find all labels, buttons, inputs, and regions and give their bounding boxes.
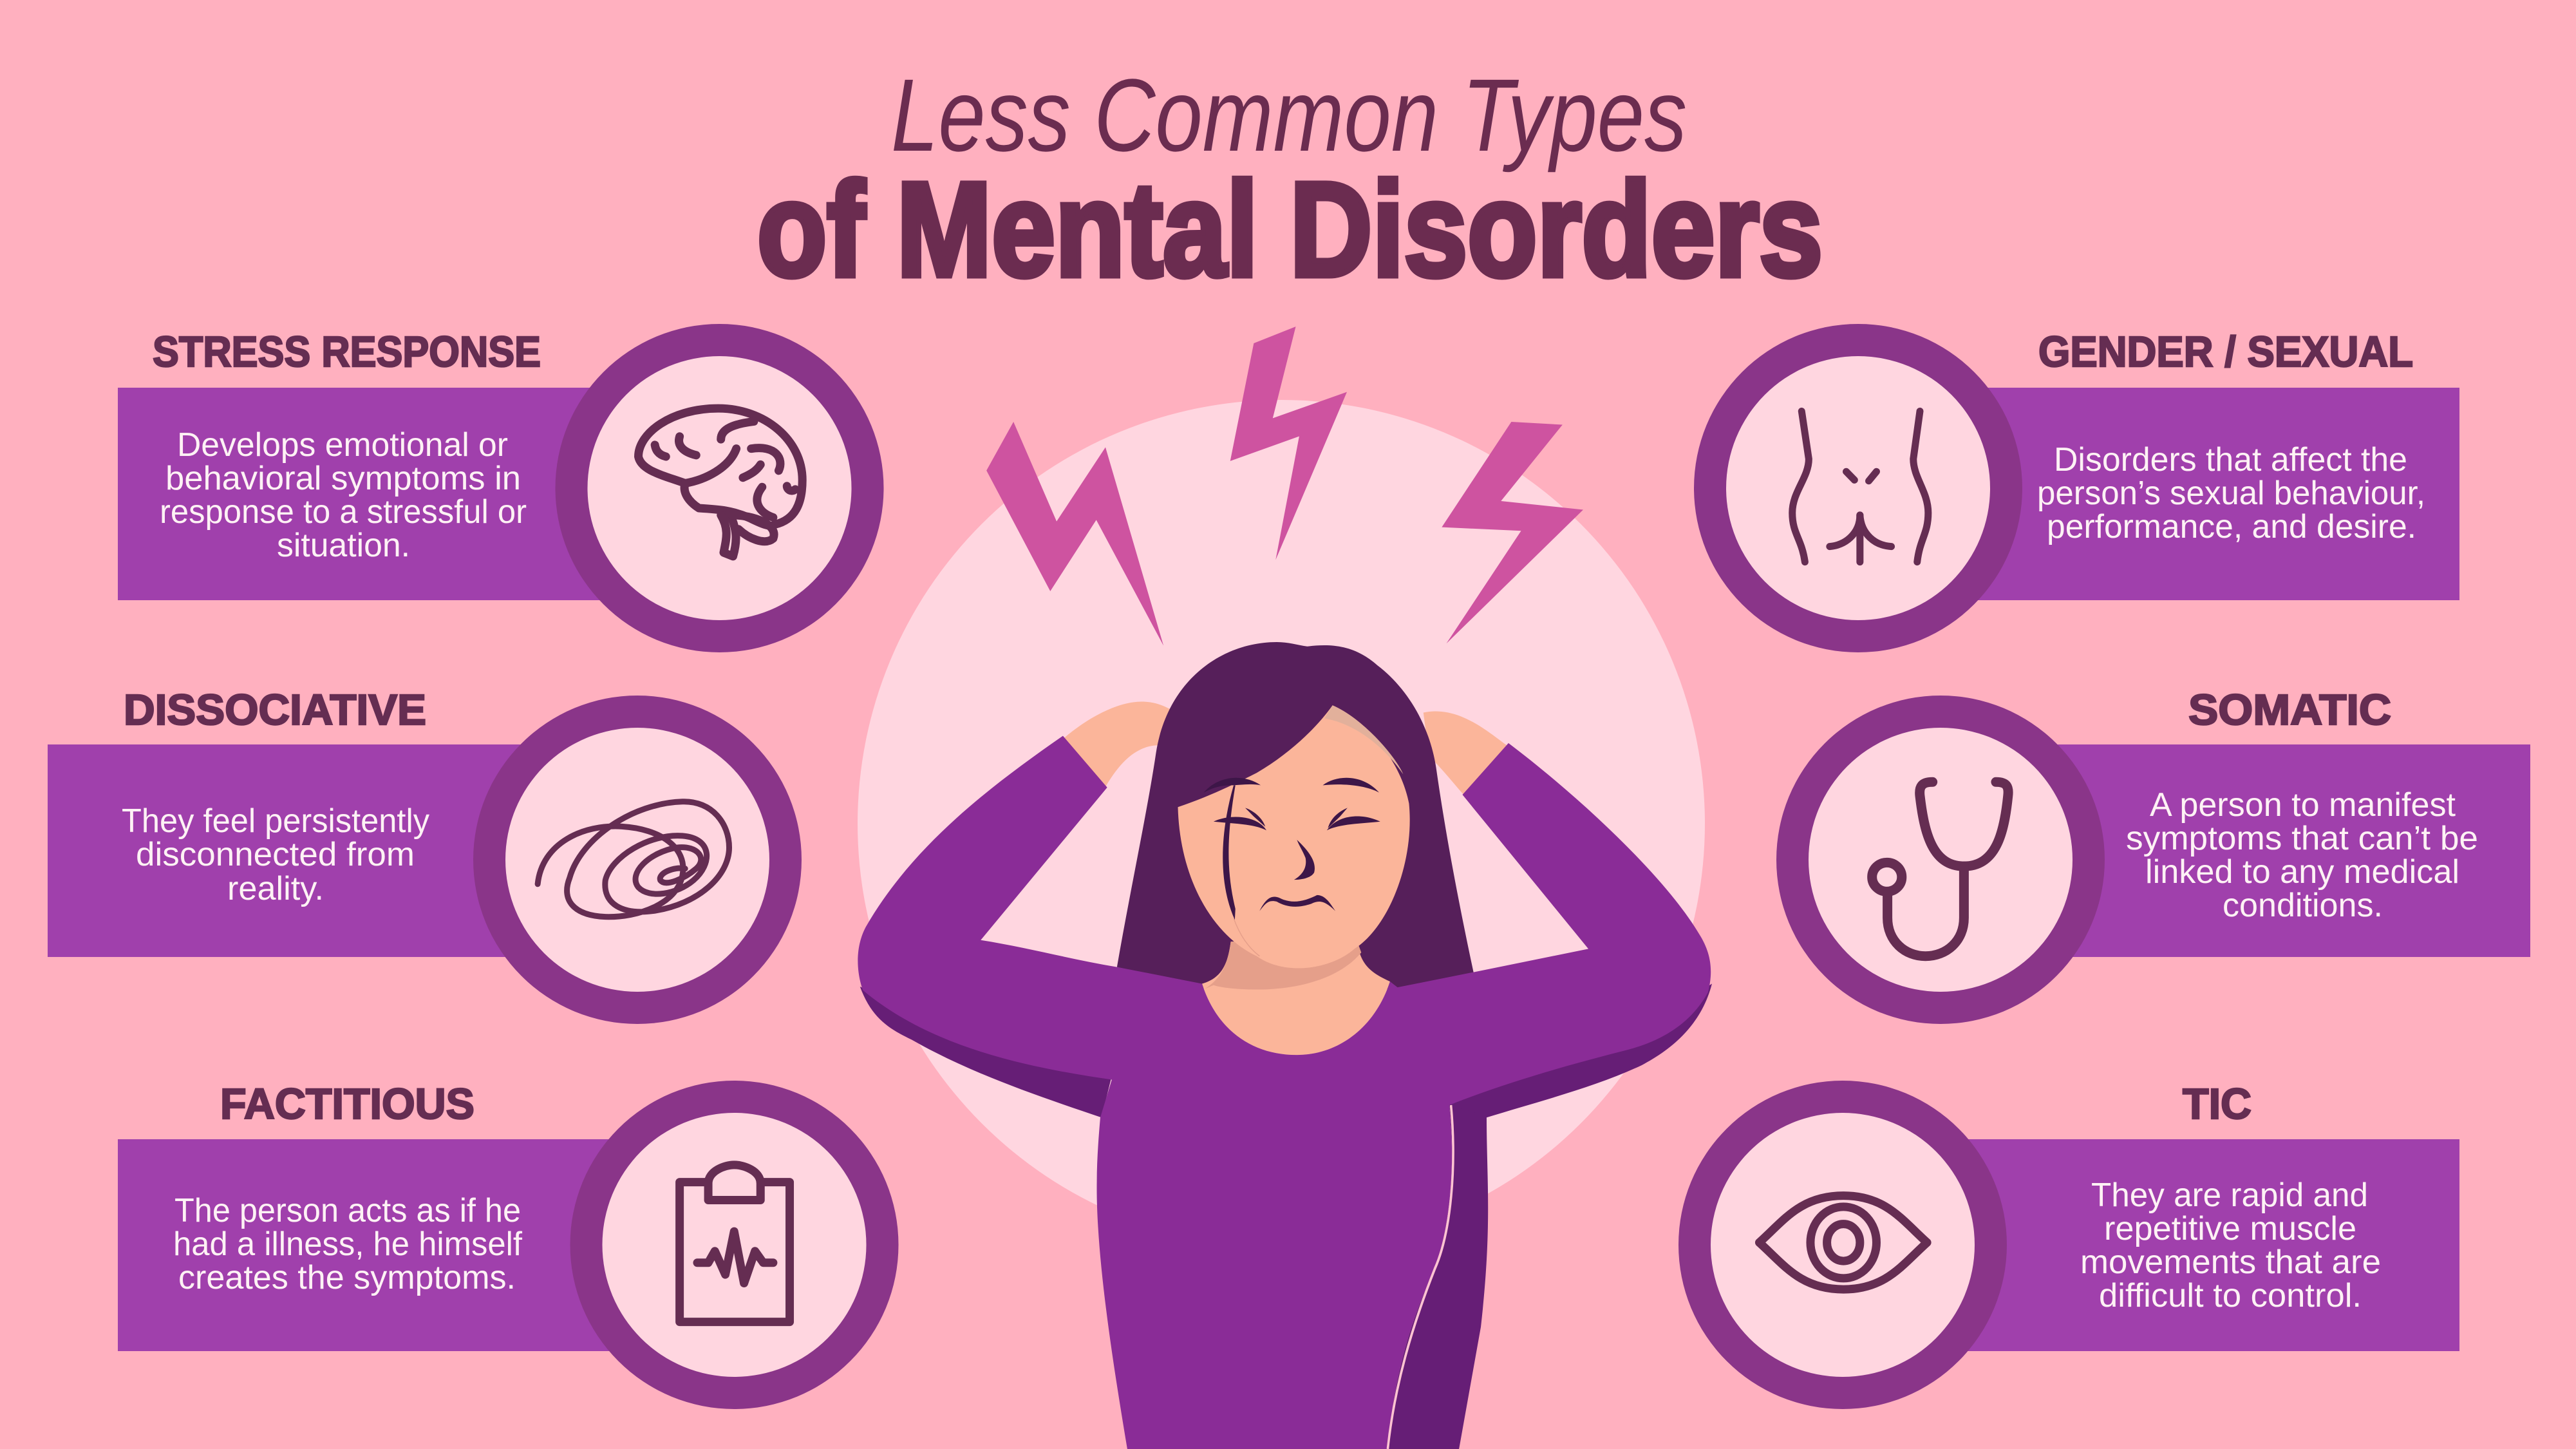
- text: gender / sexual: [2037, 441, 2425, 545]
- text: somatic: linked to any medical: [2145, 853, 2459, 891]
- text: tic: [2080, 1177, 2381, 1314]
- central background circle: [858, 400, 1705, 1247]
- icon: eye: [1759, 1196, 1927, 1289]
- title: [757, 57, 1823, 305]
- hair: [1117, 642, 1474, 992]
- neck shadow: [1205, 942, 1361, 990]
- text: somatic: symptoms that can’t be: [2126, 820, 2478, 857]
- icon: lightning bolts: [986, 327, 1583, 646]
- neck: [1202, 942, 1390, 1055]
- panel: somatic: [1776, 686, 2530, 1024]
- icon: scribble: [538, 802, 729, 917]
- icon: brain: [639, 408, 802, 556]
- sweater: [858, 736, 1711, 1449]
- icon: torso: [1792, 411, 1928, 562]
- text: tic: repetitive muscle: [2104, 1210, 2356, 1247]
- face: [1178, 705, 1410, 968]
- text: factitious: had a illness, he himself: [173, 1226, 523, 1263]
- text: somatic: A person to manifest: [2150, 786, 2456, 824]
- title: of Mental Disorders: [757, 155, 1823, 305]
- hands: [1064, 702, 1507, 795]
- panel: gender / sexual: [1694, 324, 2459, 652]
- sleeve shadows: [860, 984, 1712, 1449]
- heading: tic: TIC: [2183, 1080, 2252, 1128]
- forehead highlight: [1324, 705, 1404, 774]
- text: somatic: [2126, 786, 2478, 924]
- text: tic: movements that are: [2080, 1244, 2381, 1281]
- text: gender / sexual: person’s sexual behaviour,: [2037, 475, 2425, 512]
- text: stress response: behavioral symptoms in: [165, 460, 521, 497]
- heading: stress response: STRESS RESPONSE: [153, 328, 541, 376]
- icon: clipboard with pulse: [680, 1165, 790, 1322]
- text: somatic: conditions.: [2223, 887, 2383, 924]
- facial features: [1204, 778, 1380, 920]
- text: stress response: [160, 426, 527, 564]
- panel: dissociative: [48, 686, 802, 1024]
- text: dissociative: disconnected from: [136, 836, 415, 873]
- panel: tic: [1678, 1080, 2459, 1409]
- text: factitious: creates the symptoms.: [178, 1259, 516, 1296]
- text: tic: difficult to control.: [2099, 1277, 2362, 1314]
- heading: gender / sexual: GENDER / SEXUAL: [2038, 328, 2413, 376]
- text: gender / sexual: Disorders that affect the: [2054, 441, 2407, 478]
- text: factitious: The person acts as if he: [174, 1192, 521, 1229]
- panel: factitious: [118, 1080, 899, 1409]
- text: gender / sexual: performance, and desire.: [2047, 508, 2416, 545]
- sweater fold line: [1387, 1105, 1453, 1449]
- heading: factitious: FACTITIOUS: [220, 1080, 475, 1128]
- text: stress response: response to a stressful or: [160, 493, 527, 531]
- illustration: stressed woman with lightning bolts: [858, 327, 1712, 1449]
- title: Less Common Types: [891, 57, 1687, 173]
- heading: dissociative: DISSOCIATIVE: [124, 686, 426, 734]
- cheek line: [1234, 918, 1259, 956]
- text: dissociative: [122, 802, 429, 907]
- panel: stress response: [118, 324, 883, 652]
- icon: stethoscope: [1872, 782, 2008, 956]
- text: stress response: Develops emotional or: [177, 426, 508, 464]
- text: factitious: [173, 1192, 523, 1296]
- heading: somatic: SOMATIC: [2188, 686, 2391, 734]
- text: stress response: situation.: [277, 527, 410, 564]
- text: dissociative: reality.: [227, 870, 324, 907]
- text: dissociative: They feel persistently: [122, 802, 429, 840]
- text: tic: They are rapid and: [2091, 1177, 2368, 1214]
